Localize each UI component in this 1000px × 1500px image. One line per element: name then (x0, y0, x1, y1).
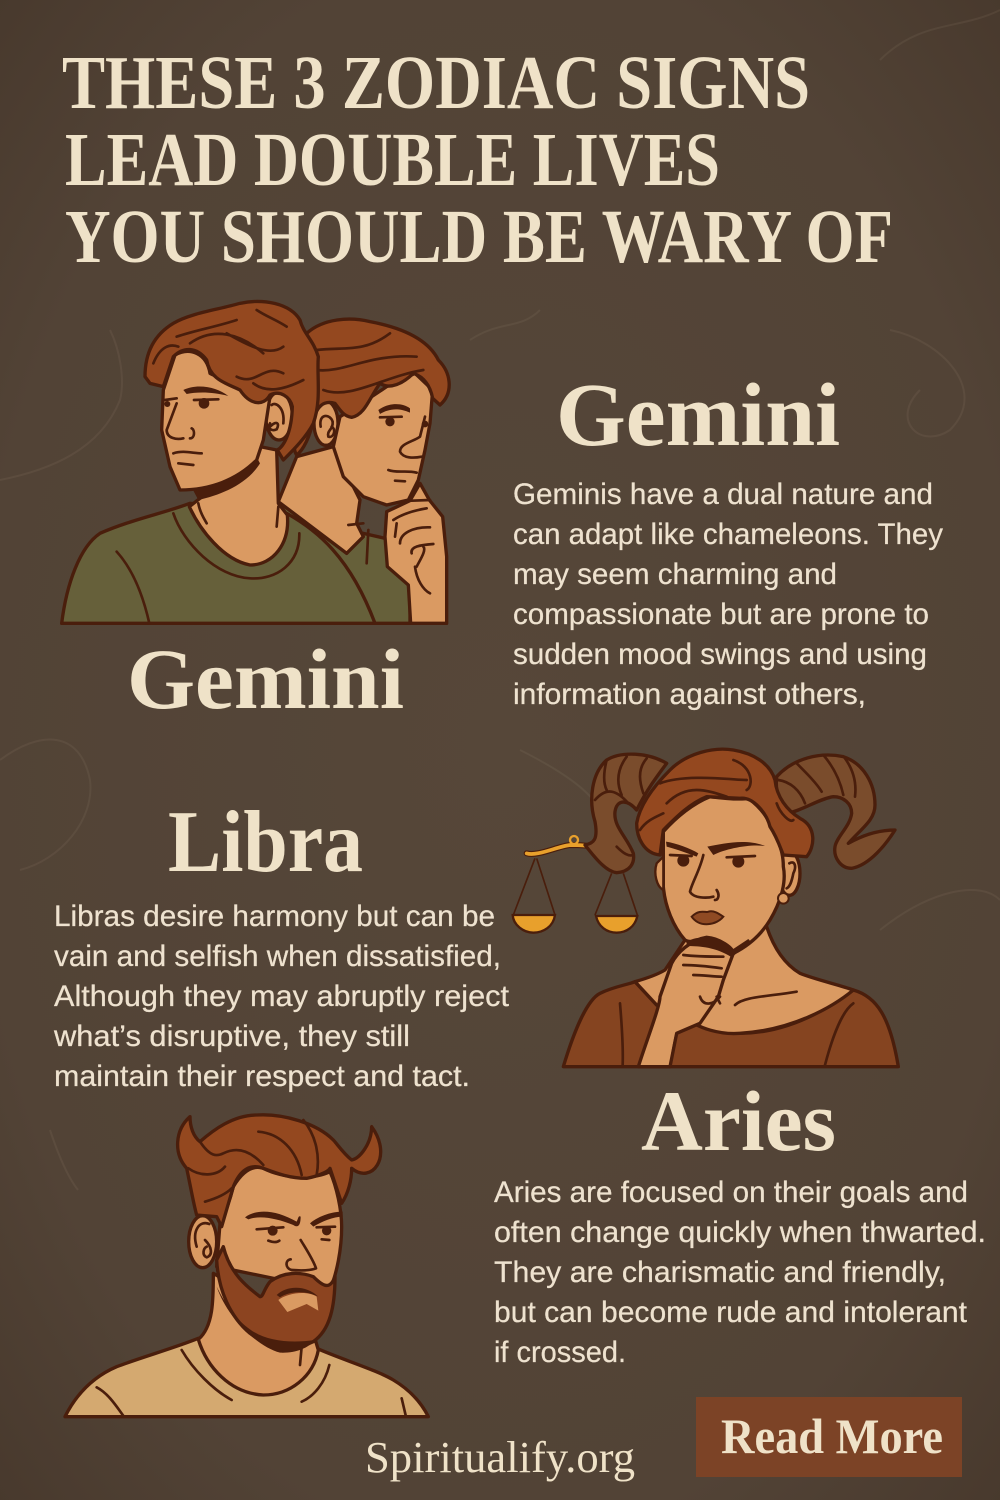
text block: Aries description: but can become rude and intolerant (494, 1296, 968, 1329)
face details (666, 842, 765, 857)
heading: Gemini (under illustration): Gemini (127, 631, 404, 727)
title: THESE 3 ZODIAC SIGNS (62, 41, 810, 125)
illustration: Gemini twins (62, 301, 449, 623)
neck (198, 1273, 318, 1395)
text block: Libra description: what’s disruptive, they still (53, 1020, 410, 1053)
back twin hand (385, 483, 447, 623)
horn left (585, 754, 667, 873)
panel: Gemini text (513, 366, 943, 711)
text block: Aries description: often change quickly when thwarted. (494, 1216, 986, 1249)
ear (189, 1216, 217, 1268)
button: Read More (696, 1397, 962, 1477)
illustration: bearded man with hair horns (65, 1115, 428, 1417)
heading: Libra: Libra (168, 794, 363, 891)
hand (638, 937, 733, 1067)
heading: Aries: Aries (641, 1073, 836, 1169)
face (217, 1167, 342, 1290)
face details (245, 1212, 343, 1227)
panel: Libra text (53, 794, 510, 1093)
text block: Gemini description: compassionate but are prone to (513, 598, 929, 631)
chest (635, 927, 853, 1034)
text block: Libra description: maintain their respect and tact. (54, 1060, 470, 1093)
text block: Libra description: vain and selfish when dissatisfied, (54, 940, 501, 973)
text block: Libra description (53, 900, 510, 1093)
text block: Aries description: if crossed. (494, 1336, 626, 1369)
text block: Gemini description: can adapt like chameleons. They (513, 518, 943, 551)
horn right (776, 755, 895, 868)
panel: Aries text (494, 1073, 986, 1369)
back twin (217, 319, 449, 623)
dress (563, 982, 898, 1067)
hair (178, 1115, 381, 1227)
text block: Gemini description: Geminis have a dual nature and (513, 478, 933, 511)
text block: Gemini description: sudden mood swings and using (513, 638, 927, 671)
text block: Aries description (494, 1176, 986, 1369)
front twin (62, 301, 375, 623)
text block: Gemini description: information against others, (513, 678, 866, 711)
brand: Spiritualify.org: Spiritualify.org (365, 1433, 635, 1482)
title: LEAD DOUBLE LIVES (65, 118, 720, 202)
beard (217, 1247, 335, 1347)
title (62, 41, 893, 279)
illustration: woman with ram horns and scales (513, 749, 898, 1067)
text block: Aries description: Aries are focused on their goals and (494, 1176, 968, 1209)
text block: Gemini description: may seem charming and (513, 558, 837, 591)
button: Read More: Read More (721, 1408, 943, 1464)
text block: Gemini description (513, 478, 943, 711)
icon: balance scales (513, 836, 637, 933)
hair and face (779, 851, 800, 895)
text block: Libra description: Although they may abruptly reject (54, 980, 510, 1013)
text block: Libra description: Libras desire harmony but can be (54, 900, 495, 933)
shirt (65, 1338, 428, 1417)
heading: Gemini: Gemini (556, 366, 840, 465)
text block: Aries description: They are charismatic and friendly, (494, 1256, 946, 1289)
